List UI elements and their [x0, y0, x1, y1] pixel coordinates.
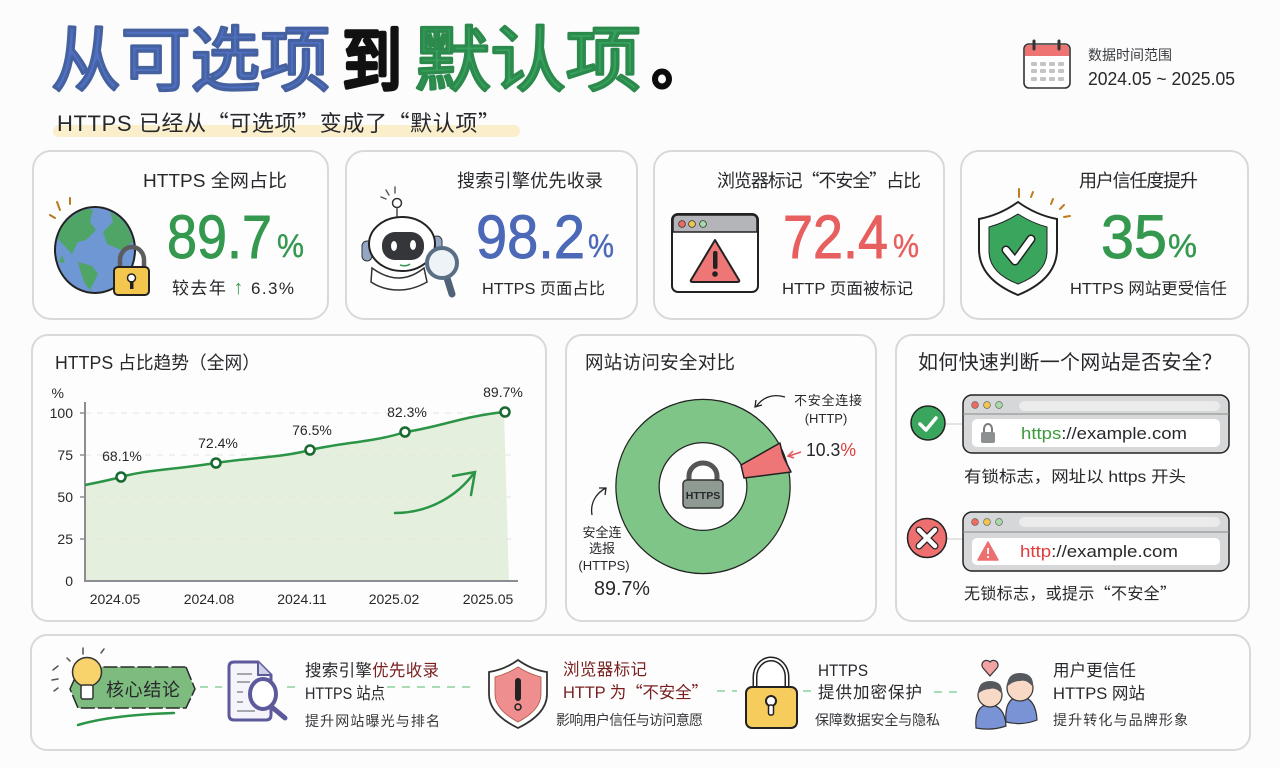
- panel: quick check: [896, 335, 1249, 621]
- item text: HTTPS 网站: [1053, 684, 1145, 703]
- note: HTTPS 网站更受信任: [1070, 280, 1227, 298]
- date range: [1088, 47, 1235, 89]
- item text: 浏览器标记: [563, 660, 647, 679]
- icon: check badge: [911, 406, 962, 440]
- item text: 用户更信任: [1053, 661, 1136, 680]
- url text: https://example.com: [1021, 424, 1187, 443]
- change note: 较去年 ↑ 6.3%: [172, 277, 294, 299]
- item: search engines: [229, 661, 440, 729]
- metric: %: [277, 228, 304, 264]
- line chart: 2025.02: [369, 591, 420, 607]
- line chart: [50, 384, 523, 607]
- label: secure: 选报: [589, 541, 615, 556]
- url text: http://example.com: [1020, 542, 1178, 561]
- card title: 用户信任度提升: [1079, 171, 1198, 191]
- metric: 98.2: [476, 203, 585, 271]
- item: user trust: [976, 660, 1188, 729]
- card title: 搜索引擎优先收录: [457, 171, 603, 191]
- icon: HTTPS lock: [683, 463, 723, 508]
- item text: 保障数据安全与隐私: [815, 712, 940, 728]
- line chart: 2024.05: [90, 591, 141, 607]
- metric: %: [893, 228, 919, 264]
- item text: [305, 661, 440, 729]
- badge: core conclusion: 核心结论: [106, 680, 180, 700]
- panel: HTTPS share: [33, 151, 328, 319]
- label: secure: 89.7%: [594, 578, 650, 600]
- heading: 如何快速判断一个网站是否安全？: [918, 351, 1222, 374]
- icon: warning shield: [489, 660, 547, 728]
- line chart: 72.4%: [198, 435, 238, 451]
- line chart: 2024.11: [277, 591, 327, 607]
- icon: globe with lock: [50, 198, 149, 295]
- panel: browser marking: [654, 151, 944, 319]
- icon: two people with heart: [976, 660, 1037, 729]
- metric: %: [588, 228, 614, 264]
- subtitle with highlight: HTTPS 已经从“可选项”变成了“默认项”: [57, 106, 500, 138]
- item: browser marks: [489, 660, 708, 728]
- item text: [815, 662, 940, 728]
- title: 从可选项: [51, 22, 330, 101]
- title: 默认项: [415, 22, 641, 101]
- label: secure: 安全连: [582, 525, 622, 540]
- date range: 2024.05 ~ 2025.05: [1088, 69, 1235, 89]
- icon: browser warning: [672, 214, 758, 292]
- heading: HTTPS 占比趋势（全网）: [55, 353, 260, 373]
- item text: [1053, 661, 1188, 728]
- label: secure: [578, 488, 650, 600]
- line chart: 76.5%: [292, 422, 332, 438]
- item text: 提升转化与品牌形象: [1053, 712, 1188, 728]
- panel: search engine: [346, 151, 637, 319]
- metric: %: [1168, 228, 1197, 264]
- icon: robot with magnifier: [362, 187, 457, 294]
- note: HTTPS 页面占比: [482, 280, 605, 298]
- note: HTTP 页面被标记: [782, 280, 913, 298]
- panel: trend chart: [32, 335, 546, 621]
- metric: 35: [1101, 203, 1167, 271]
- label: insecure: [755, 393, 862, 460]
- card title: 浏览器标记“不安全”占比: [717, 167, 921, 193]
- badge: core conclusion: [52, 648, 195, 725]
- card title: HTTPS 全网占比: [143, 171, 287, 191]
- icon: green shield: [979, 189, 1070, 295]
- browser: secure: [963, 395, 1229, 453]
- date range: 数据时间范围: [1088, 47, 1172, 63]
- item text: HTTPS 站点: [305, 684, 385, 703]
- item text: HTTPS: [818, 662, 868, 680]
- icon: cross badge: [908, 518, 962, 558]
- item text: 提升网站曝光与排名: [305, 713, 440, 729]
- icon: HTTPS lock: HTTPS: [686, 490, 720, 502]
- line chart: %: [52, 385, 64, 401]
- line chart: 82.3%: [387, 404, 427, 420]
- item text: HTTP 为“不安全”: [563, 679, 708, 703]
- icon: document search: [229, 662, 285, 720]
- heading: 网站访问安全对比: [585, 352, 735, 373]
- warning glyph: [978, 542, 998, 560]
- line chart: 75: [57, 447, 73, 463]
- line chart: 2025.05: [463, 591, 514, 607]
- line chart: 89.7%: [483, 384, 523, 400]
- lock glyph: [981, 424, 995, 443]
- metric: 72.4: [783, 203, 888, 271]
- line chart: 50: [57, 489, 73, 505]
- label: secure: (HTTPS): [578, 558, 630, 573]
- line chart: 25: [57, 531, 73, 547]
- line chart: 100: [50, 405, 73, 421]
- item: encryption: [746, 659, 940, 728]
- item text: 提供加密保护: [818, 683, 922, 702]
- line chart: 0: [65, 573, 73, 589]
- panel: user trust: [961, 151, 1248, 319]
- label: insecure: 10.3%: [806, 440, 856, 460]
- caption: insecure: 无锁标志，或提示“不安全”: [964, 580, 1176, 604]
- item text: [556, 660, 708, 728]
- title: 到: [342, 23, 402, 100]
- label: insecure: 不安全连接: [794, 393, 862, 408]
- metric: 89.7: [167, 203, 272, 271]
- item text: 搜索引擎优先收录: [305, 661, 439, 680]
- line chart: 2024.08: [184, 591, 235, 607]
- title: [51, 22, 669, 101]
- panel: core conclusions: [31, 635, 1250, 750]
- caption: secure: 有锁标志，网址以 https 开头: [964, 468, 1186, 486]
- label: insecure: (HTTP): [805, 411, 847, 426]
- item text: 影响用户信任与访问意愿: [556, 712, 703, 728]
- browser: insecure: [963, 512, 1229, 571]
- donut chart: [638, 421, 791, 552]
- panel: donut comparison: [566, 335, 876, 621]
- icon: gold lock: [746, 659, 797, 728]
- connector dashes: [200, 687, 964, 692]
- icon: calendar: [1024, 41, 1070, 88]
- line chart: 68.1%: [102, 448, 142, 464]
